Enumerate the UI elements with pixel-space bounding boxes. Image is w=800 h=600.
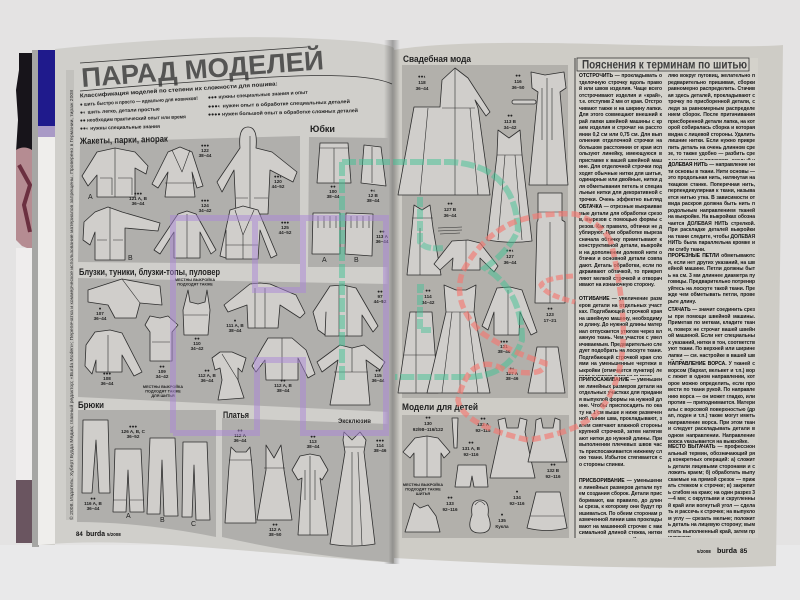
panel: skirts background — [308, 137, 389, 267]
model size labels: 36–44 — [132, 201, 145, 206]
model size labels: 92–116 — [545, 474, 561, 479]
text column backdrop — [576, 58, 758, 538]
model size labels: ●● — [194, 336, 200, 341]
model size labels: 38–44 — [229, 328, 242, 333]
model size labels: ● — [99, 306, 102, 311]
model size labels: ШИТЬЯ — [416, 492, 430, 496]
model size labels: 92–116 — [475, 428, 491, 433]
model size labels: 118 — [418, 80, 426, 85]
model size labels: 34–42 — [504, 125, 517, 130]
model size labels: 126 A, B, C — [121, 429, 146, 434]
model size labels: МЕСТНЫ ВЫКРОЙКА — [143, 385, 183, 389]
model size labels: 36–44 — [444, 213, 457, 218]
model size labels: 114 — [424, 294, 432, 299]
model size labels: ●● — [204, 368, 210, 373]
purple outline — [173, 218, 386, 433]
panel: dresses background — [222, 418, 389, 562]
model size labels: ● — [501, 512, 504, 517]
garment: trousers A — [113, 449, 144, 512]
model size labels: 124 — [201, 203, 209, 208]
difficulty classification: ●●●◐ нужен опыт в обработке специальных деталей — [208, 98, 350, 110]
model size labels: ●●◐ — [506, 248, 514, 253]
panel letters: A — [322, 257, 327, 264]
model size labels: ●◐ — [509, 366, 515, 371]
garment: dress 3 — [292, 454, 328, 535]
model size labels: 113 B — [504, 119, 517, 124]
model size labels: 107 — [96, 311, 104, 316]
model size labels: ●● — [447, 495, 453, 500]
model size labels: 132 A — [477, 422, 490, 427]
garment: jacket 125 — [220, 206, 277, 259]
difficulty classification: ●●● нужны специальные знания и опыт — [208, 90, 309, 101]
model size labels: МЕСТНЫ ВЫКРОЙКА — [403, 483, 443, 487]
garment: jacket 108 — [85, 330, 142, 376]
model size labels: 38–44 — [307, 444, 320, 449]
folio: page 84: 5/2008 — [107, 532, 121, 537]
garment: gathered skirt A — [312, 213, 340, 254]
model size labels: 36–44 — [372, 378, 385, 383]
garment: cardigan 97 — [313, 285, 378, 336]
model size labels: 132 B — [547, 468, 560, 473]
difficulty classification: ●● необходим практический опыт или время — [80, 113, 186, 124]
heading: exclusive: Эксклюзив — [338, 419, 371, 425]
model size labels: 36–44 — [94, 316, 107, 321]
model size labels: 34–42 — [422, 300, 435, 305]
model size labels: 111 A, B — [226, 323, 244, 328]
garment: child skirt — [527, 492, 567, 530]
terms heading: Пояснения к терминам по шитью — [582, 60, 747, 72]
model size labels: ●●● — [376, 438, 384, 443]
heading: skirts: Юбки — [310, 124, 335, 134]
model size labels: 38–50 — [269, 532, 282, 537]
garment: child blouse — [405, 503, 440, 532]
spine shadow — [384, 40, 400, 564]
model size labels: 36–44 — [376, 239, 389, 244]
model size labels: ● — [516, 489, 519, 494]
model size labels: 108 — [103, 376, 111, 381]
model size labels: 133 — [446, 501, 454, 506]
panel: trousers background — [77, 410, 216, 537]
panel letters: C — [191, 521, 196, 528]
model size labels: 38–44 — [199, 153, 212, 158]
heading: trousers: Брюки — [78, 400, 104, 410]
model size labels: ПОДХОДЯТ ТАКЖЕ — [145, 390, 181, 394]
model size labels: 38–46 — [498, 349, 511, 354]
model size labels: 36–44 — [87, 506, 100, 511]
model size labels: 38–46 — [374, 448, 387, 453]
model size labels: ●●● — [134, 191, 142, 196]
model size labels: 36–44 — [101, 381, 114, 386]
model size labels: ПОДХОДЯТ ТАКЖЕ — [405, 488, 441, 492]
panel letters: A — [126, 513, 131, 520]
model size labels: 131 A, B — [462, 446, 481, 451]
model size labels: 123 — [546, 312, 554, 317]
garment: blouse 112 A,B — [252, 338, 315, 380]
garment: wedding jacket — [482, 287, 537, 335]
model size labels: Кукла — [495, 524, 509, 529]
model size labels: ●● — [237, 428, 243, 433]
difficulty classification: ●●◐ нужны специальные знания — [80, 124, 160, 132]
model size labels: ●● — [377, 289, 383, 294]
garment: anorak B — [83, 207, 160, 260]
panel letters: B — [354, 257, 359, 264]
model size labels: 38–44 — [367, 198, 380, 203]
garment: tie — [452, 418, 458, 448]
model size labels: ●● — [280, 378, 286, 383]
garment: long gown — [330, 432, 375, 546]
garment: shorts — [455, 465, 488, 487]
garment: parka 120 — [217, 127, 297, 214]
model size labels: 36–44 — [201, 378, 214, 383]
model size labels: 112 A, B — [274, 383, 293, 388]
garment: trousers B — [147, 438, 178, 516]
model size labels: 130 — [424, 421, 432, 426]
model size labels: ●●◐ — [418, 74, 426, 79]
model size labels: 112 A — [269, 527, 282, 532]
garment: corset and skirt — [535, 193, 565, 303]
folio: page 85: 5/2008 — [697, 549, 711, 554]
left page — [40, 37, 394, 563]
panel letters: B — [160, 517, 165, 524]
garment: skirt A — [317, 143, 351, 183]
title: ПАРАД МОДЕЛЕЙ — [80, 44, 325, 93]
panel letters — [88, 194, 359, 528]
panel letters: B — [128, 255, 133, 262]
garment: wedding gown 3 — [487, 130, 532, 242]
model size labels: 113 — [309, 439, 317, 444]
left edge photo of facing page — [16, 50, 55, 547]
garment: bridal skirt — [528, 347, 565, 393]
model size labels: ●●● — [201, 143, 209, 148]
model size labels: ●● — [159, 364, 165, 369]
garment: peasant blouse 111 — [224, 283, 305, 328]
panel: jackets background — [78, 136, 300, 264]
model size labels: ●● — [515, 73, 521, 78]
model size labels: 17–21 — [544, 318, 557, 323]
model size labels: 38–46 — [506, 376, 519, 381]
garment: skirt B — [361, 145, 386, 186]
garment: girl dress 2 — [528, 418, 567, 462]
model size labels: ●●● — [103, 371, 111, 376]
model size labels: ДЛЯ ШИТЬЯ — [151, 394, 175, 398]
model size labels: 34–42 — [199, 208, 212, 213]
model size labels: 92–116 — [509, 501, 525, 506]
model size labels: 92/98–116/122 — [413, 427, 444, 432]
green letter strokes — [420, 197, 445, 330]
model size labels: ●● — [447, 201, 453, 206]
panel: children background — [402, 415, 569, 538]
model size labels: 110 — [193, 341, 201, 346]
model size labels: 127 B — [444, 207, 457, 212]
model size labels: ●● — [547, 306, 553, 311]
model size labels: 127 — [506, 254, 514, 259]
garment: gathered skirt B — [345, 213, 373, 256]
garment: trousers 116 — [82, 420, 110, 493]
garment: kimono 107 — [88, 279, 162, 318]
garment: dress 2 — [257, 445, 292, 520]
model size labels — [84, 73, 561, 537]
model size labels: ●● — [507, 113, 513, 118]
garment: off-shoulder gown — [427, 285, 490, 393]
model size labels: 36–44 — [416, 86, 429, 91]
model size labels: ●● — [375, 368, 381, 373]
model size labels: 97 — [377, 294, 383, 299]
model size labels: ●● — [90, 496, 96, 501]
term: proreznye petli: ПРОРЕЗНЫЕ ПЕТЛИ обметываются, если нет других указаний, на швейной машине. Петли должны быть на см. 3 мм длиннее диаметра пуговицы. Предварительно потренируйтесь на лоскуте такой ткани. Прежде чем обметывать петли, проверьте длину. — [668, 253, 755, 304]
folio: page 85 — [697, 546, 748, 555]
model size labels: 113 A — [376, 234, 389, 239]
garment: girl dress — [490, 418, 535, 478]
folio: page 84: 84 — [76, 532, 83, 538]
model size labels: ●● — [330, 184, 336, 189]
model size labels: ●●● — [129, 424, 137, 429]
model size labels: 116 A, B — [84, 501, 103, 506]
model size labels: 36–44 — [504, 260, 517, 265]
model size labels: ●●◐ — [274, 174, 282, 179]
model size labels: МЕСТНЫ ВЫКРОЙКА — [175, 278, 215, 282]
model size labels: 114 — [376, 443, 384, 448]
folio: page 84: burda — [86, 531, 105, 538]
garment: wedding gown 1 — [398, 68, 490, 195]
garment: anorak A — [82, 148, 148, 197]
heading: dresses: Платья — [223, 410, 249, 420]
difficulty classification — [80, 80, 358, 132]
garment: wrap top 112 — [212, 352, 246, 400]
model size labels: 38–44 — [277, 388, 290, 393]
garment: sash — [438, 227, 462, 234]
difficulty classification: ● шить быстро и просто — идеально для новичков! — [80, 95, 198, 108]
model size labels: ●●● — [281, 220, 289, 225]
panel: wedding background — [402, 65, 568, 398]
model size labels: ●●● — [201, 198, 209, 203]
garment: boy shirt — [403, 436, 450, 477]
model size labels: 34–42 — [156, 374, 169, 379]
red small loop — [541, 276, 575, 302]
model size labels: 38–44 — [327, 194, 340, 199]
model size labels: 92–116 — [442, 507, 458, 512]
difficulty classification: ●◐ шить легко, детали простые — [80, 107, 160, 116]
model size labels: 115 — [374, 373, 382, 378]
garment: t-shirt 109 — [145, 316, 178, 361]
column rule — [574, 58, 576, 538]
garment: tiered skirt — [398, 312, 438, 393]
folio: page 84 — [76, 531, 121, 538]
term: napravlenie vorsa: НАПРАВЛЕНИЕ ВОРСА. У тканей с ворсом (бархат, вельвет и т.п.) ворс лежит в одном направлении, которое можно определить, если провести по ткани рукой. По направлению ворса — он может гладко, или против — приподнимается. Материалы с ворсовой поверхностью (драп, лоден и т.п.) также могут иметь направление ворса. При этом ткани следует раскладывать детали в одном направлении. Направление ворса указывается на выкройке. — [668, 361, 755, 443]
model size labels: ●◐ — [370, 188, 376, 193]
term: obtachka: ОБТАЧКА — отрезные выкраиваемые детали для обработки срезов, вырезов с помощью формы срезов. Как правило, обтачки не дублируют. При обработке выреза сначала обтачку приметывают к конструктивной детали, выкройки на дополнении долевой нити обтачки и основной детали совпадают. Деталь обработки, если подкраивают обтачкой, то прикрепляют мелкой строчкой и отворачивают на изнаночную сторону. — [579, 204, 662, 288]
model size labels: 109 — [158, 369, 166, 374]
model size labels: 127 A — [506, 371, 519, 376]
garment: tunic 115 — [317, 345, 385, 405]
model size labels: 36–52 — [127, 434, 140, 439]
difficulty classification: ●●●● нужен большой опыт в обработке сложных деталей — [208, 107, 358, 118]
model size labels: ●● — [272, 522, 278, 527]
model size labels: ●● — [468, 440, 474, 445]
model size labels: ●● — [425, 288, 431, 293]
garment: jacket 124 — [154, 211, 216, 258]
heading: blouses: Блузки, туники, блузки-топы, пуловер — [79, 267, 220, 277]
model size labels: ПОДХОДЯТ ТАКЖЕ — [177, 282, 213, 286]
difficulty classification: Классификация моделей по степени их сложности для пошива: — [80, 80, 278, 99]
garment: top 110 — [183, 290, 210, 335]
model size labels: 125 — [281, 225, 289, 230]
model size labels: 122 — [201, 148, 209, 153]
right page — [394, 43, 783, 568]
model size labels: ●●● — [500, 339, 508, 344]
panel: blouses background — [78, 278, 389, 412]
heading: wedding: Свадебная мода — [403, 54, 472, 64]
model size labels: ●● — [425, 415, 431, 420]
model size labels: 36–44 — [234, 438, 247, 443]
model size labels: 120 — [274, 179, 282, 184]
heading: children: Модели для детей — [402, 402, 478, 412]
green dashed loop — [342, 160, 522, 380]
model size labels: 121 — [500, 344, 508, 349]
garment: belt — [512, 100, 536, 104]
garment: dress 1 — [225, 447, 256, 523]
garment: wedding gown 2 — [529, 72, 568, 185]
model size labels: 36–50 — [512, 85, 525, 90]
model size labels: 44–52 — [374, 299, 387, 304]
model size labels: ●● — [310, 434, 316, 439]
model size labels: 92–116 — [463, 452, 479, 457]
heading: jackets: Жакеты, парки, анорак — [79, 134, 168, 146]
red dashed loop — [458, 214, 623, 440]
garment: top and skirt — [407, 205, 441, 275]
imprint vertical text: © 2008. Издатель: Хуберт Бурда Медиа; главный редактор; «Burda Moden»; Перепечатка и коммерческое использование материалов запрещены. Проверено в Германии, тираж 2008 — [69, 89, 74, 520]
model size labels: ●● — [550, 462, 556, 467]
model size labels: ● — [234, 318, 237, 323]
folio: page 85: 85 — [740, 548, 748, 555]
panel letters: A — [88, 194, 93, 201]
garment: bolero — [434, 240, 498, 272]
model size labels: 44–52 — [272, 184, 285, 189]
model size labels: 135 — [498, 518, 506, 523]
model size labels: 44–52 — [279, 230, 292, 235]
term: priposazhivanie: ПРИПОСАЖИВАНИЕ — уменьшение линейных размеров детали на отдельных участках для придания выпуклой формы на нужной длине. Чтобы приспосадить по окату на 1 см выше и ниже размеченной линии шва, прокладывают, затем смягчают влажной стороны крупной строчкой, затем натягивают нитки до нужной длины. При выполнении плечевых швов часть приспосаживается нижнему слою ткани. Избыток стягивается со стороны спинки. — [579, 377, 662, 468]
model size labels: 116 — [514, 79, 522, 84]
model size labels: 134 — [513, 495, 521, 500]
model size labels: 121 A, B — [129, 196, 148, 201]
folio: page 85: burda — [717, 546, 738, 555]
model size labels: 112 A, B — [198, 373, 217, 378]
garment: jacket 122 — [152, 147, 203, 197]
model size labels: ●● — [480, 416, 486, 421]
model size labels: ●● — [379, 229, 385, 234]
model size labels: 34–42 — [191, 346, 204, 351]
model size labels: 100 — [329, 189, 337, 194]
garment: trousers C — [182, 442, 210, 520]
model size labels: 12 B — [368, 193, 379, 198]
term: dolevaya nit: ДОЛЕВАЯ НИТЬ — направление нити основы в ткани. Нити основы — это продольная нить, натянутая на ткацком станке. Поперечная нить, перпендикулярная к ткани, называется нитью утка. В зависимости от вида раскроя должна быть нить продольным направлением тканей на выкройке. На выкройках обозначается ДОЛЕВАЯ НИТЬ стрелкой. При раскладке деталей выкройки на ткани следите, чтобы ДОЛЕВАЯ НИТЬ была параллельна кромке или сгибу ткани. — [668, 162, 755, 252]
garment: doll — [470, 500, 490, 533]
model size labels: 112 A — [234, 433, 247, 438]
